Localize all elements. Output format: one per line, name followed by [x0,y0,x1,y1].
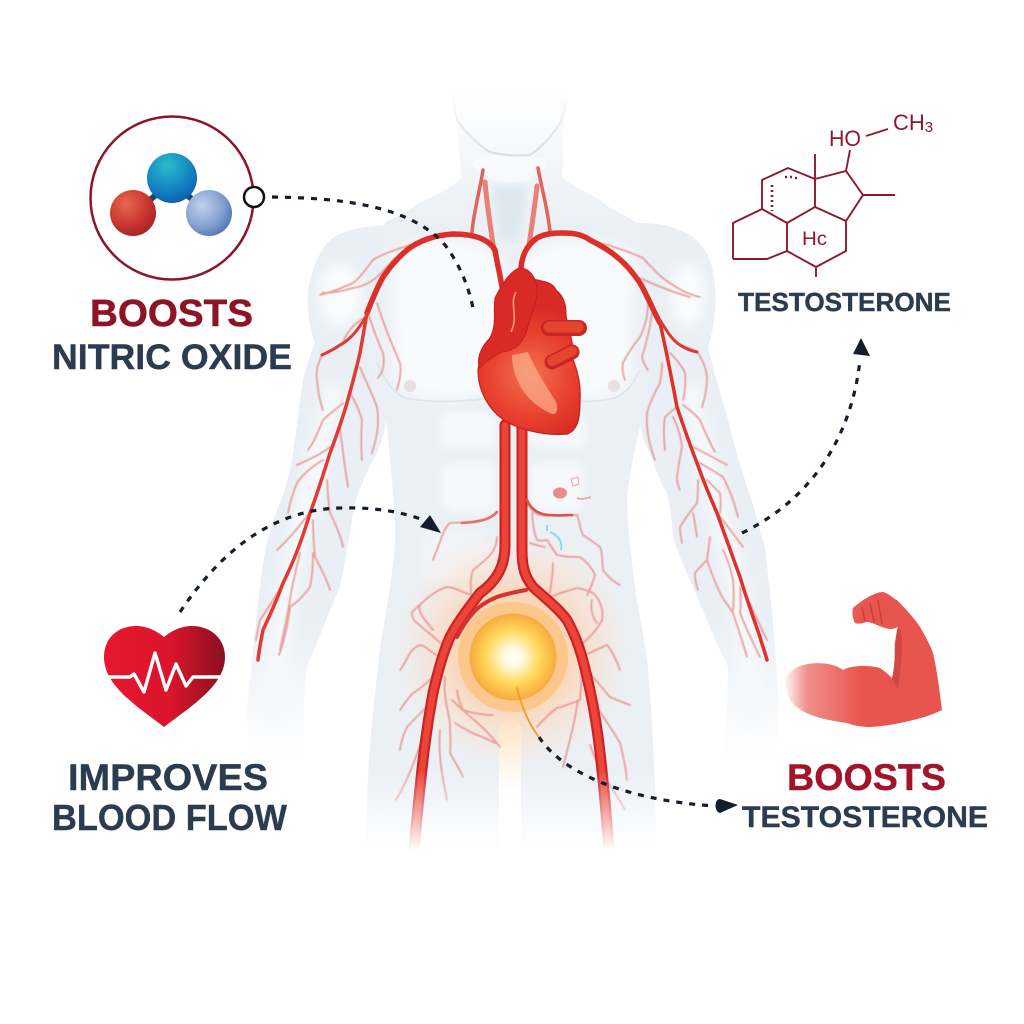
pale blue atom [186,190,232,236]
pelvic and abdominal branches [396,500,630,810]
right shoulder highlight [670,263,706,327]
connector node [244,187,264,207]
left arch [367,234,503,313]
left renal [462,512,497,523]
abdomen highlights [440,412,496,448]
left arm highlight [275,385,335,730]
heading: testosterone lower: TESTOSTERONE [742,801,988,834]
left outer carotid [472,170,483,232]
blue vessel [547,525,561,550]
left arm branches [256,245,410,655]
HO label: HO [829,126,861,151]
left aorta outline [414,425,505,850]
chin line [453,95,567,156]
double bond dots [772,177,800,211]
pale organ mark [577,497,591,499]
arrow: blood flow to abdomen [180,508,441,612]
arrow: arm to testosterone [742,338,870,533]
blue atom [147,153,197,203]
heart highlight [512,352,557,414]
pelvic cross vessel [457,590,526,637]
branch vessels pale [256,242,767,810]
right chest highlight [520,239,635,400]
heading: boosts (nitric oxide): BOOSTS [90,293,253,335]
ring [90,116,254,280]
biceps shadow [892,627,902,690]
right arm side branch [660,320,697,352]
left aorta fill [414,425,505,850]
right renal [527,500,572,515]
CH3 label: 3 [925,119,933,136]
right arm highlight [690,385,752,730]
right arm branches [597,242,767,657]
arrow: pelvis to boosts testosterone [539,737,738,813]
bonds [733,129,895,277]
head [450,85,570,156]
organ details [547,477,591,550]
neck collar [470,153,548,183]
atrium [478,268,537,368]
small loop [571,477,579,486]
torso, neck and legs [366,85,656,860]
right arch [521,233,660,323]
heading: testosterone: TESTOSTERONE [738,287,951,317]
trachea shade [492,186,528,240]
heading: blood flow: BLOOD FLOW [52,797,287,838]
lower pulmonary stub [552,351,572,362]
red spot [553,488,567,498]
heading: nitric oxide: NITRIC OXIDE [52,338,292,377]
left arm side branch [322,315,367,355]
icon: nitric oxide molecule [90,116,264,280]
bonds [150,193,194,201]
icon: heart with pulse [104,626,225,727]
Hc label: Hc [802,229,827,250]
right outer carotid [538,168,550,232]
main arteries [258,168,767,850]
right aorta fill [522,425,609,850]
pec lines [377,363,640,401]
pelvic glow [391,528,635,772]
outer ring [458,602,568,712]
shoulder highlights [318,263,362,327]
CH3 label: CH [893,110,925,135]
body silhouette [247,85,778,860]
red atom [110,190,156,236]
left inner carotid [485,182,494,250]
central light strip [499,720,521,860]
right inner carotid [529,186,537,245]
arrow: nitric oxide to heart [272,197,473,308]
left arm [247,225,400,760]
heading: improves: IMPROVES [68,757,268,798]
right aorta outline [522,425,609,850]
chest highlights [390,239,505,400]
leg fade [360,770,670,862]
knuckle lines [862,600,882,624]
orange line [517,688,538,736]
right arm artery [660,323,767,660]
heart [478,268,580,434]
heart body [478,279,580,434]
nipples [404,380,416,392]
icon: flexed arm [783,592,942,727]
pulse line [106,653,223,692]
right arm [625,223,778,760]
upper pulmonary stub [549,327,579,328]
testosterone structure [733,110,933,277]
halo [391,528,635,772]
heading: boosts (testosterone): BOOSTS [787,757,946,798]
atrium highlight [511,292,516,332]
left arm artery [258,313,367,660]
sun core [470,614,556,700]
